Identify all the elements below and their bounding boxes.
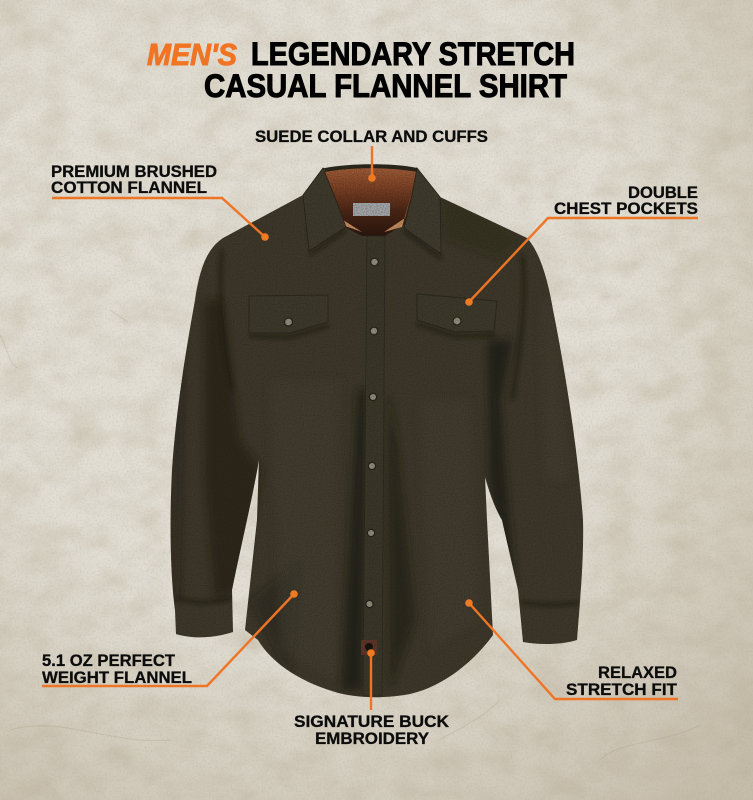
shirt: left pocket flap: [249, 295, 328, 333]
shirt: left collar flap: [303, 168, 346, 251]
callout: suede collar and cuffs: [255, 128, 488, 182]
callout: signature buck embroidery: SIGNATURE BUCK: [294, 713, 449, 731]
callout: suede collar and cuffs: SUEDE COLLAR AND CUFFS: [255, 128, 488, 146]
callout: 5.1 oz perfect weight flannel: 5.1 OZ PERFECT: [42, 652, 175, 670]
shirt illustration: [160, 160, 590, 705]
callout: relaxed stretch fit: [465, 599, 678, 699]
callout: signature buck embroidery: EMBROIDERY: [315, 730, 429, 748]
title: line one: LEGENDARY STRETCH: [251, 36, 575, 72]
callout: premium brushed cotton flannel: [51, 163, 269, 241]
shirt: tan lining trim: [330, 190, 411, 232]
shirt: inner collar lining: [323, 165, 417, 236]
shirt: collar band top edge: [325, 164, 417, 172]
shirt: right collar flap: [404, 168, 441, 254]
title: line two: CASUAL FLANNEL SHIRT: [204, 68, 567, 104]
title: [147, 36, 575, 104]
title: MEN'S in orange brush style: MEN'S: [147, 37, 237, 72]
callout: signature buck embroidery: [294, 649, 449, 748]
callout: 5.1 oz perfect weight flannel: WEIGHT FLANNEL: [42, 669, 192, 687]
callout: relaxed stretch fit: STRETCH FIT: [566, 681, 677, 699]
callout: premium brushed cotton flannel: COTTON FLANNEL: [51, 179, 207, 197]
shirt: right pocket flap: [417, 294, 497, 332]
callout: 5.1 oz perfect weight flannel: [42, 590, 298, 687]
callout: premium brushed cotton flannel: PREMIUM BRUSHED: [51, 163, 217, 181]
shirt: signature buck patch: [361, 640, 377, 655]
shirt: placket: [363, 236, 385, 696]
shirt: buttons: [284, 258, 461, 608]
shirt: neck label: [353, 203, 390, 216]
callout: double chest pockets: CHEST POCKETS: [554, 200, 698, 218]
callout: double chest pockets: DOUBLE: [628, 184, 698, 202]
callout: double chest pockets: [465, 184, 698, 306]
callout: relaxed stretch fit: RELAXED: [598, 664, 677, 682]
shirt: silhouette with folds: [160, 160, 590, 705]
